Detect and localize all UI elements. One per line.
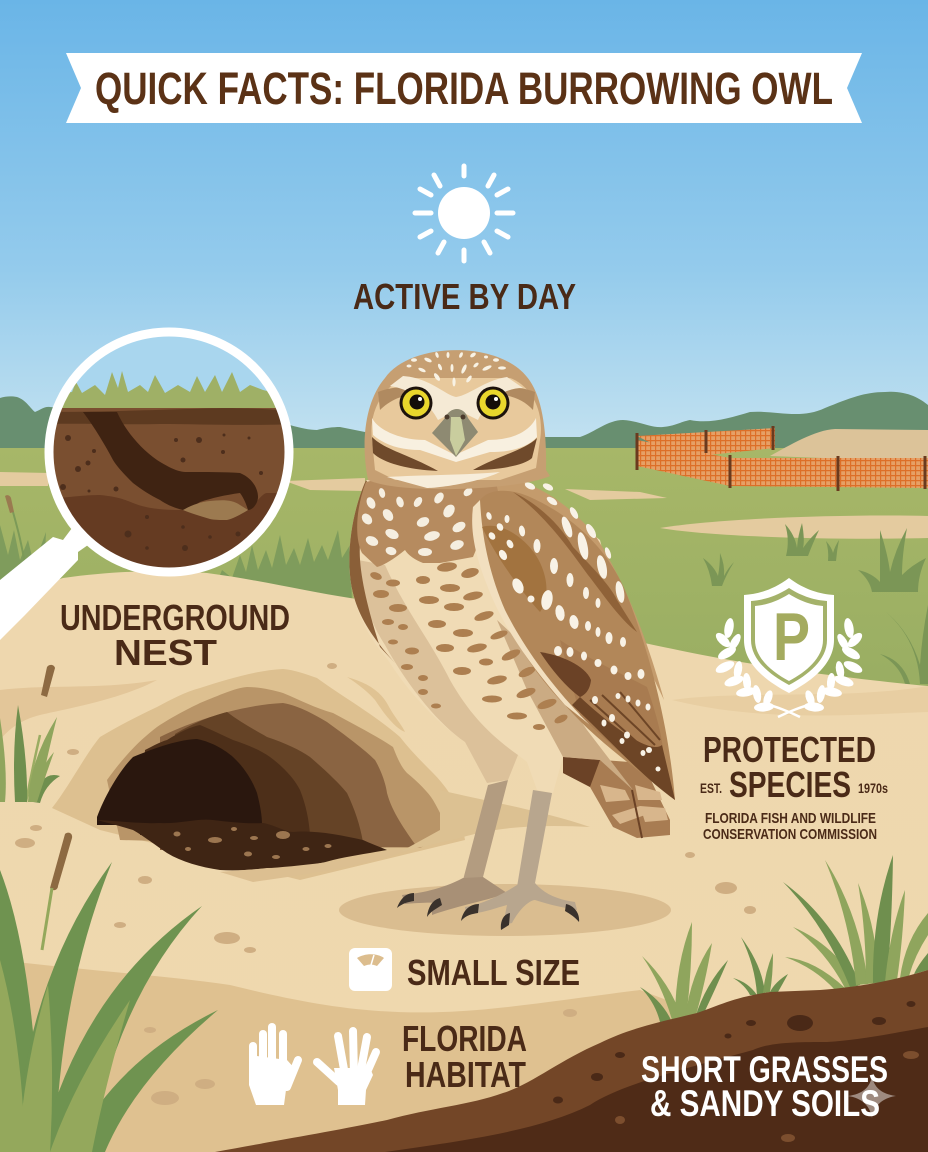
heading: active by day: ACTIVE BY DAY	[353, 276, 576, 317]
owl wing cream edge	[472, 500, 590, 725]
owl white brows	[390, 376, 523, 420]
sand pebbles	[15, 663, 756, 1105]
owl chest	[357, 475, 505, 567]
sand ground	[0, 571, 928, 1152]
owl left foot	[402, 877, 507, 915]
inset soil	[54, 408, 284, 510]
owl ground shadow	[339, 884, 671, 936]
owl body	[349, 478, 640, 793]
burrow dirt floor	[97, 820, 387, 870]
owl shoulder	[495, 478, 664, 700]
owl facial disc	[371, 378, 541, 480]
owl white cheek band	[372, 418, 537, 462]
text: florida habitat: HABITAT	[405, 1054, 526, 1095]
text: protected species: CONSERVATION COMMISSION	[703, 826, 877, 843]
owl eye patches	[378, 387, 535, 410]
owl head	[365, 350, 550, 489]
grass left mid with cattail	[0, 665, 60, 803]
owl crown spots	[406, 352, 506, 386]
text: small size: SMALL SIZE	[407, 952, 580, 993]
inset tunnel	[83, 412, 258, 510]
owl wing rounded feathers end	[560, 640, 675, 800]
burrow ring 2	[107, 687, 450, 848]
owl tail	[563, 757, 670, 838]
sand beside the burrow lip	[400, 790, 590, 852]
sky background	[0, 0, 928, 450]
burrow dark opening	[97, 739, 262, 825]
orange fence	[637, 426, 928, 491]
brown soil corner	[215, 970, 928, 1152]
owl wing streak	[513, 492, 637, 632]
text: florida habitat: FLORIDA	[402, 1018, 527, 1059]
text: short grasses and sandy soils	[641, 1049, 888, 1124]
text: protected species	[700, 729, 888, 843]
sand mound behind fence	[770, 429, 928, 462]
darker soil layer	[385, 1027, 928, 1152]
owl chest spots	[360, 486, 474, 556]
owl wing spots	[485, 481, 660, 772]
burrow ring 5	[140, 725, 310, 835]
inset lower soil	[63, 493, 277, 568]
green meadow	[0, 448, 928, 708]
owl left leg	[460, 780, 508, 900]
text: protected species: 1970s	[858, 780, 888, 796]
owl left eye	[400, 386, 432, 420]
grass bottom right clumps	[640, 855, 928, 1022]
owl right foot	[465, 883, 577, 925]
heading: underground nest	[60, 597, 290, 673]
grass bottom left foreground	[0, 833, 218, 1152]
heading: underground nest: NEST	[114, 632, 217, 673]
text: protected species: FLORIDA FISH AND WILDLIFE	[705, 810, 876, 827]
burrowing owl	[349, 350, 675, 930]
owl talons	[397, 893, 579, 930]
burrow entrance	[52, 669, 465, 882]
icon: sun	[415, 166, 513, 261]
heading: underground nest: UNDERGROUND	[60, 597, 290, 638]
inset top soil band	[57, 408, 281, 425]
cattail behind the handle	[5, 495, 25, 565]
sand ridge beside burrow	[347, 677, 405, 732]
sand shading right	[672, 686, 928, 715]
meadow grass clumps	[703, 523, 928, 684]
magnifier handle	[0, 528, 88, 640]
magnifier inset: underground nest	[40, 325, 300, 585]
owl wing dark panel	[482, 526, 546, 612]
owl right eye	[476, 386, 510, 420]
burrow ring 4	[170, 712, 363, 850]
owl dark patch	[540, 652, 591, 697]
owl flank stripe	[358, 560, 518, 783]
owl wing	[473, 491, 675, 800]
laurel left	[713, 617, 774, 712]
sand patches on the meadow	[0, 472, 928, 539]
distant hills	[0, 392, 928, 455]
sand shading left	[0, 680, 157, 740]
owl back band	[497, 620, 633, 790]
owl collar	[387, 472, 500, 488]
owl primaries	[572, 697, 675, 800]
icon: right hand	[317, 1031, 376, 1105]
owl neck stripes	[372, 437, 537, 471]
owl left dark edge	[349, 480, 395, 663]
text: protected species: SPECIES	[729, 764, 851, 805]
burrow lower lip	[220, 850, 410, 882]
icon: left hand	[249, 1027, 298, 1105]
lower sand band	[0, 960, 720, 1152]
text: florida habitat	[402, 1018, 527, 1095]
inset chamber floor	[183, 500, 248, 520]
burrow ring 3	[160, 703, 417, 850]
icon: weighing scale	[349, 948, 392, 991]
icon: protected shield with laurel	[713, 578, 865, 717]
icon: protected shield with laurel: P	[773, 599, 810, 675]
owl belly bars	[369, 561, 569, 730]
inset grass	[62, 371, 276, 408]
burrow mound outer ring	[52, 669, 465, 880]
text: protected species: PROTECTED	[703, 729, 876, 770]
soil stones	[553, 1001, 919, 1142]
title banner	[66, 53, 862, 123]
text: protected species: EST.	[700, 780, 722, 796]
laurel right	[804, 617, 865, 712]
owl beak	[432, 409, 478, 457]
owl right leg	[517, 790, 552, 887]
meadow grass behind the lens	[0, 525, 352, 602]
watermark sparkle	[848, 1076, 896, 1118]
